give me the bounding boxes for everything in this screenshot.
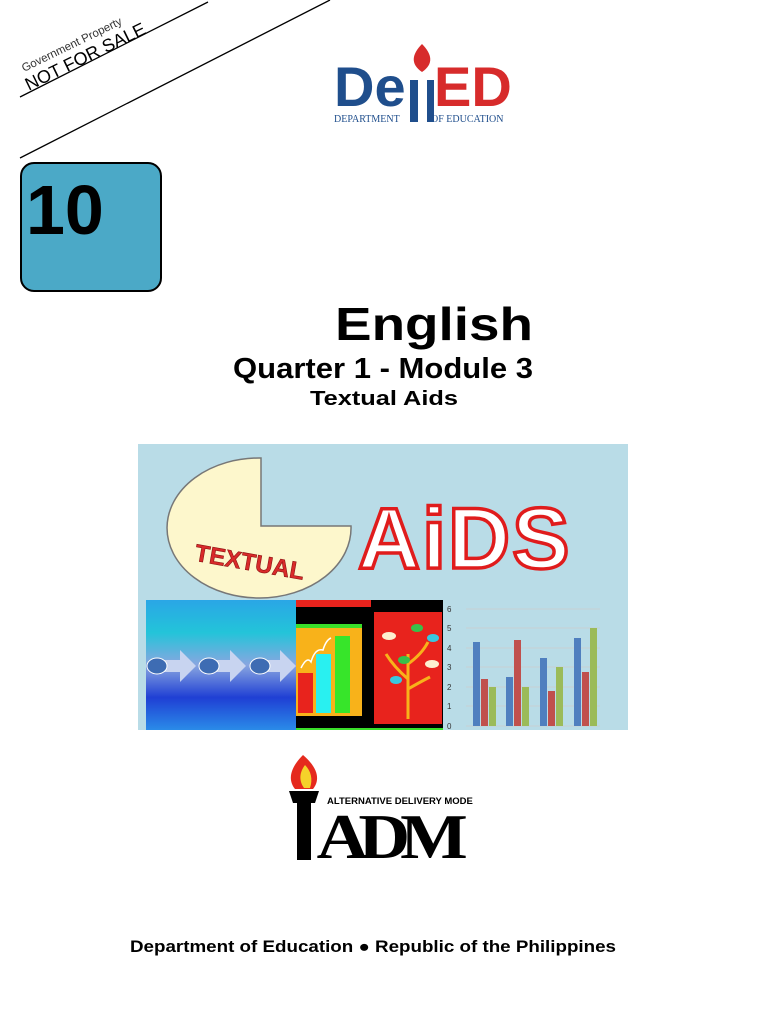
bar chart: 1 <box>447 702 452 711</box>
subtitle: Quarter 1 - Module 3: Quarter 1 - Module 3 <box>233 353 533 385</box>
bar chart: 5 <box>447 624 452 633</box>
corner stamp: not for sale: Government Property <box>20 16 124 75</box>
corner stamp: not for sale <box>20 0 330 159</box>
logo: DepED: OF EDUCATION <box>431 114 504 125</box>
logo: ADM alternative delivery mode: ALTERNATIVE DELIVERY MODE <box>327 796 473 807</box>
bar chart: 4 <box>447 644 452 653</box>
bar chart <box>447 605 600 731</box>
grade box: 10: 10 <box>26 171 104 249</box>
bar chart: 2 <box>447 683 452 692</box>
blue arrow panel <box>146 600 296 730</box>
footer: Department of Education • Republic of the Philippines: Department of Education ● Republic of the Philippines <box>130 938 616 956</box>
logo: DepED: DEPARTMENT <box>334 114 400 125</box>
AiDS lettering: AiDS <box>358 491 571 587</box>
grade box: 10 <box>20 162 162 292</box>
colorful bars and tree panel <box>296 600 443 730</box>
cover image: textual aids <box>138 444 628 730</box>
bar chart: 3 <box>447 663 452 672</box>
logo: ADM alternative delivery mode <box>289 755 473 863</box>
pie with TEXTUAL: TEXTUAL <box>193 540 306 586</box>
corner stamp: not for sale: NOT FOR SALE <box>22 19 149 94</box>
title: English: English <box>335 298 533 350</box>
pie with TEXTUAL <box>167 458 351 598</box>
subtitle: Textual Aids: Textual Aids <box>310 388 458 410</box>
title block: English / Quarter / Textual Aids <box>233 298 533 410</box>
logo: DepED: De <box>334 55 406 118</box>
logo: DepED: ED <box>434 55 512 118</box>
logo: DepED <box>334 44 512 125</box>
bar chart: 6 <box>447 605 452 614</box>
